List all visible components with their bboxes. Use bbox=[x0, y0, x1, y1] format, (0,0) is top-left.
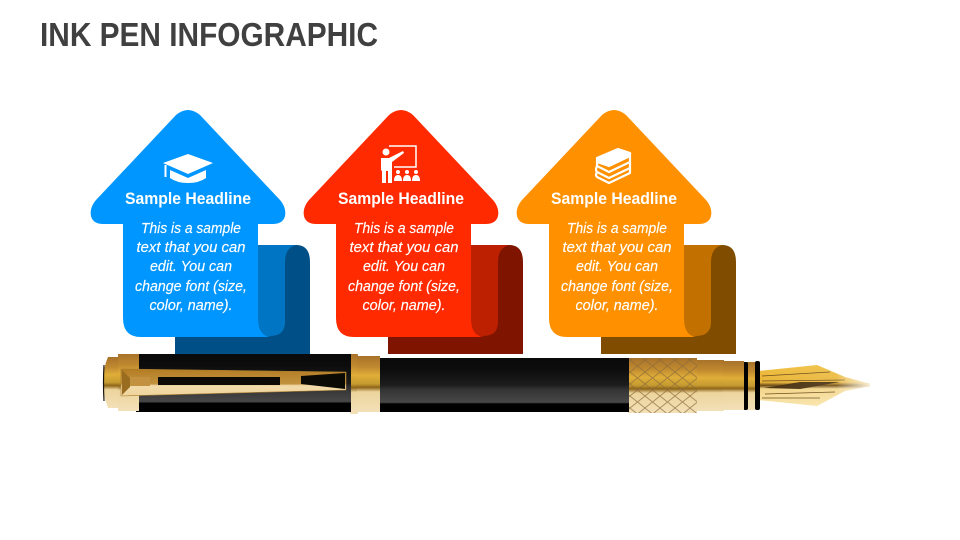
icon: teacher at board bbox=[381, 146, 420, 183]
orange body text bbox=[561, 221, 673, 314]
blue ribbon back bbox=[175, 245, 310, 354]
pen gold collars bbox=[696, 360, 744, 411]
red body text: change font (size, bbox=[348, 279, 460, 295]
icon: stack of books bbox=[596, 149, 630, 183]
pen crosshatched grip bbox=[628, 358, 697, 413]
blue headline: Sample Headline bbox=[125, 190, 251, 208]
orange headline: Sample Headline bbox=[551, 190, 677, 208]
pen centre band bbox=[350, 354, 380, 414]
pen clip bbox=[121, 369, 346, 396]
pen cap end bbox=[103, 354, 139, 411]
red body text: color, name). bbox=[362, 298, 446, 314]
panel: red arrow bbox=[304, 110, 523, 354]
blue arrow shape bbox=[91, 110, 285, 337]
blue body text: This is a sample bbox=[141, 221, 241, 237]
orange arrow shape bbox=[517, 110, 711, 337]
pen cap barrel bbox=[136, 354, 351, 412]
red body text: text that you can bbox=[350, 240, 458, 256]
blue body text: text that you can bbox=[136, 240, 246, 256]
orange body text: color, name). bbox=[576, 298, 658, 314]
panel: blue arrow bbox=[91, 110, 310, 354]
blue body text: color, name). bbox=[150, 298, 232, 314]
red body text bbox=[348, 221, 460, 314]
orange ribbon fold bbox=[676, 245, 722, 336]
pen lower barrel bbox=[380, 358, 629, 412]
title: INK PEN INFOGRAPHIC bbox=[40, 16, 378, 53]
orange body text: change font (size, bbox=[561, 279, 673, 295]
orange body text: edit. You can bbox=[576, 259, 658, 275]
blue body text: change font (size, bbox=[135, 279, 247, 295]
orange ribbon back bbox=[601, 245, 736, 354]
blue body text: edit. You can bbox=[150, 259, 232, 275]
red ribbon fold bbox=[463, 245, 509, 336]
orange body text: text that you can bbox=[562, 240, 672, 256]
icon: graduation cap bbox=[163, 154, 213, 183]
blue body text bbox=[135, 221, 247, 314]
pen black rings bbox=[743, 361, 760, 410]
red arrow shape bbox=[304, 110, 498, 337]
fountain pen bbox=[103, 354, 870, 414]
panel: orange arrow bbox=[517, 110, 736, 354]
blue ribbon fold bbox=[250, 245, 296, 336]
pen nib bbox=[758, 365, 870, 406]
red ribbon back bbox=[388, 245, 523, 354]
red body text: edit. You can bbox=[363, 259, 445, 275]
red headline: Sample Headline bbox=[338, 190, 464, 208]
red body text: This is a sample bbox=[354, 221, 454, 237]
orange body text: This is a sample bbox=[567, 221, 667, 237]
